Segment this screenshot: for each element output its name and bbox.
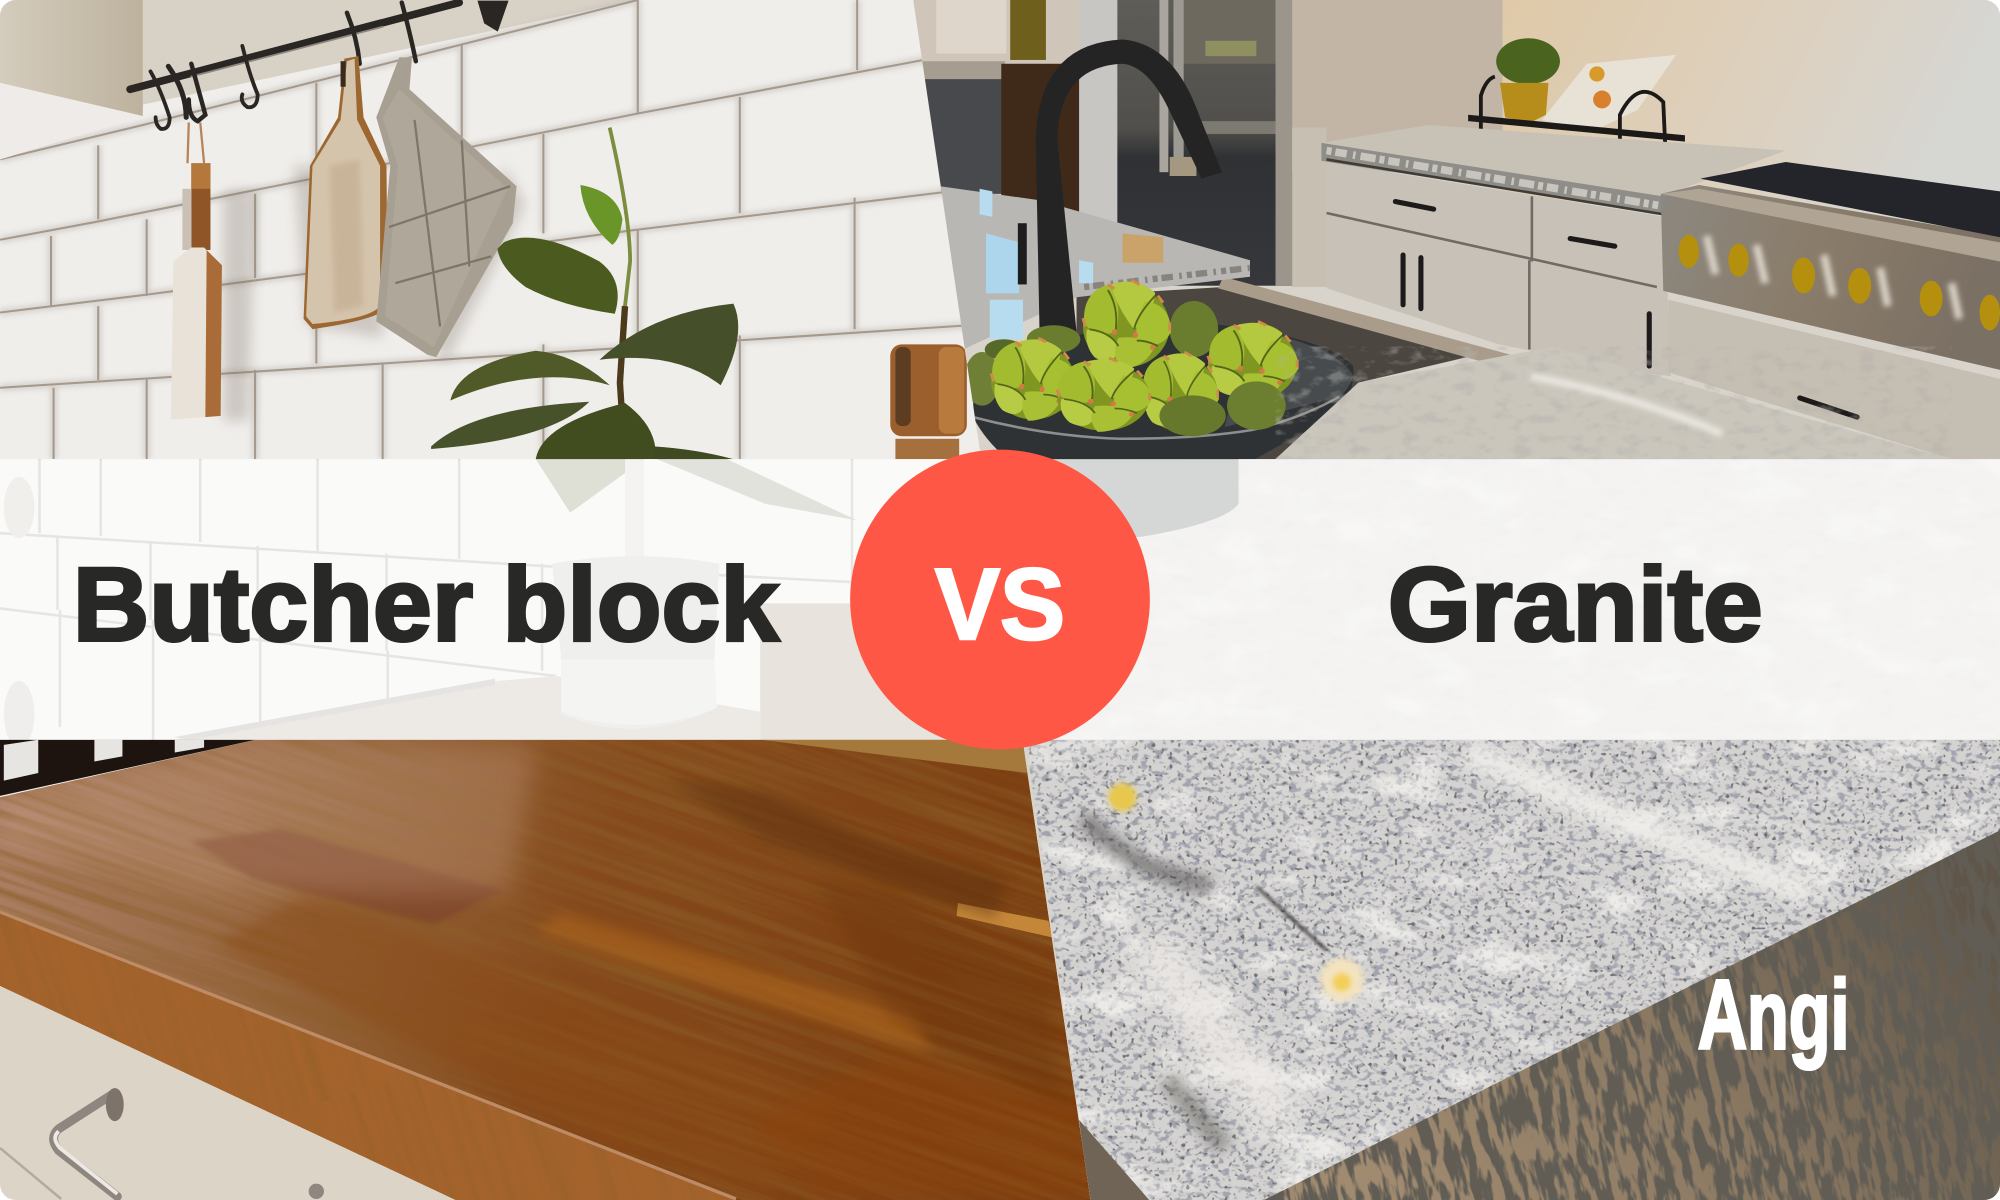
panel: granite kitchen photo [913, 0, 2000, 1200]
icon: quilted pot holder [376, 57, 517, 357]
icon: wooden pepper mill [890, 344, 967, 459]
stove cooktop [0, 740, 255, 796]
tiled wall [0, 0, 969, 459]
stainless sink [1077, 277, 1510, 459]
icon: wooden cutting board [304, 56, 388, 329]
icon: rubber plant [431, 128, 738, 459]
badge: VS circle: VS [935, 549, 1065, 661]
icon: paddle cutting board [171, 122, 222, 420]
icon: black faucet [1036, 40, 1222, 332]
band background scene [0, 459, 1024, 748]
stainless range with gold knobs [1661, 162, 2000, 370]
back wall [1292, 0, 2000, 287]
cabinets [1327, 162, 1671, 376]
panel: granite slab front face [1264, 830, 2000, 1200]
object shadows [223, 166, 526, 421]
panel: butcher block kitchen photo [0, 0, 1097, 1200]
wall cabinet [0, 0, 143, 159]
panel: granite countertop slab [1020, 740, 2000, 1200]
heading: Butcher block: Butcher block [73, 546, 780, 663]
band background granite [1052, 459, 1256, 537]
icon: bowl of artichokes [964, 280, 1353, 459]
badge: VS circle [850, 450, 1150, 749]
back granite counter [1321, 125, 1786, 214]
lower cabinet below range [1668, 300, 2000, 459]
steel refrigerator [1079, 0, 1295, 286]
heading: Granite: Granite [1388, 546, 1763, 663]
logo: Angi: Angi [1698, 959, 1849, 1069]
panel: drawer with handle [0, 986, 455, 1200]
icon: plant and cookbook stand [1468, 38, 1685, 142]
panel: butcher block countertop [0, 740, 1091, 1200]
island granite top [1276, 347, 1952, 459]
icon: hanging rail with hooks [130, 1, 508, 129]
translucent title band [0, 459, 2000, 740]
island granite edge left [940, 186, 1250, 349]
far shelf and cabinets [913, 0, 1092, 214]
